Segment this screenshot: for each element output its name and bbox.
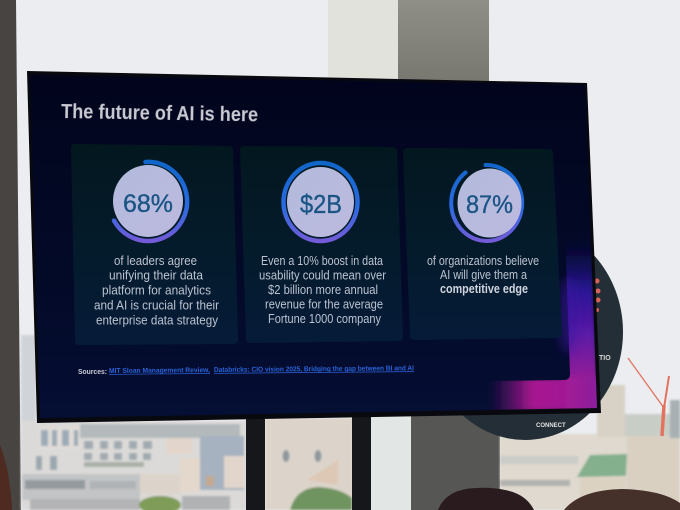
sources line: MIT Sloan Management Review,	[109, 367, 210, 375]
icon: 68% progress ring	[114, 162, 187, 241]
sources line	[78, 365, 414, 376]
text: competitive edge: competitive edge	[440, 282, 528, 296]
soft purple bleed over the panel edge	[558, 277, 578, 353]
bottom magenta glow	[490, 376, 600, 412]
panel: $2B revenue	[244, 150, 399, 339]
audience heads	[0, 445, 680, 510]
$2B disc	[287, 167, 354, 237]
sign orange dots	[594, 278, 600, 312]
text: data usability: Even a 10% boost in data	[261, 254, 383, 268]
slide background	[39, 85, 596, 418]
sources line: Sources:	[78, 369, 107, 376]
church building behind the screen posts	[265, 418, 353, 510]
slide title: The future of AI is here	[61, 101, 258, 126]
dark inner slide panel	[493, 246, 570, 381]
circular event sign behind the screen	[427, 224, 623, 440]
upper white and grey pillars	[328, 0, 489, 84]
text: competitive edge	[427, 254, 539, 296]
panel: 68% of leaders	[75, 148, 234, 341]
panel: 87% of organizations	[407, 152, 558, 336]
$2B value: $2B	[300, 189, 342, 219]
sign partial word: TIO	[599, 355, 611, 362]
city skyline through the window	[21, 335, 247, 510]
68% disc	[113, 165, 183, 237]
right purple glow	[566, 246, 597, 408]
icon: $2B full ring	[284, 163, 358, 241]
right side city view	[500, 385, 680, 510]
text: data usability	[259, 254, 386, 326]
text: competitive edge: AI will give them a	[440, 268, 527, 282]
lower white and grey pillars	[370, 415, 412, 510]
icon: 87% progress ring	[451, 165, 522, 241]
black screen mount posts	[246, 415, 371, 510]
text: data usability: Fortune 1000 company	[268, 312, 382, 326]
text: leaders agree: unifying their data	[109, 268, 203, 282]
text: data usability: usability could mean over	[259, 268, 386, 282]
87% disc	[458, 168, 522, 238]
text: leaders agree	[94, 254, 219, 328]
text: data usability: $2 billion more annual	[268, 283, 378, 297]
text: leaders agree: platform for analytics	[102, 284, 211, 298]
TV slide	[20, 70, 610, 420]
sources line: Databricks: CIO vision 2025, Bridging the gap between BI and AI	[214, 365, 414, 374]
left wall column	[0, 0, 21, 510]
text: leaders agree: enterprise data strategy	[96, 314, 219, 328]
text: data usability: revenue for the average	[265, 298, 383, 312]
sign logo text: CONNECT	[536, 423, 566, 429]
red construction crane	[628, 358, 669, 436]
87% value: 87%	[466, 191, 513, 219]
68% value: 68%	[123, 190, 173, 218]
text: competitive edge: of organizations believe	[427, 254, 539, 268]
TV bezel	[27, 71, 601, 423]
text: leaders agree: of leaders agree	[114, 254, 197, 268]
text: leaders agree: and AI is crucial for their	[94, 298, 219, 312]
